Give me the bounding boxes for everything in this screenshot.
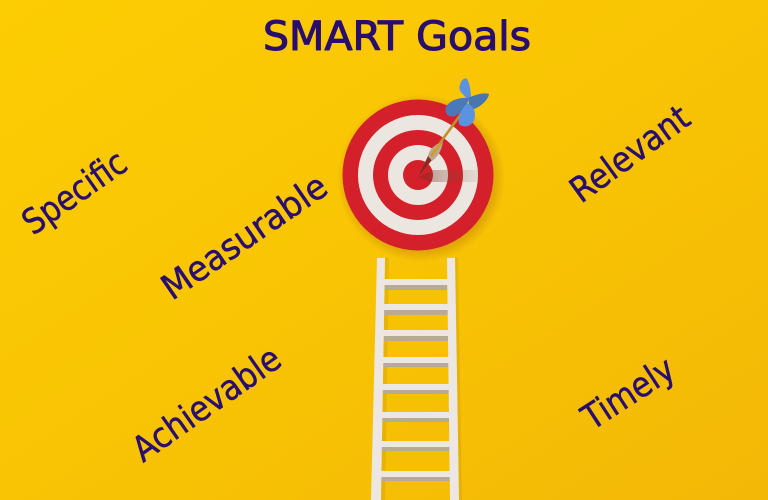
label: Achievable: Achievable bbox=[125, 339, 289, 470]
label: Specific: Specific bbox=[15, 143, 135, 243]
title: SMART Goals bbox=[263, 14, 531, 60]
target board bbox=[337, 94, 505, 262]
ladder bbox=[371, 258, 462, 500]
label: Timely: Timely bbox=[574, 349, 682, 439]
label: Measurable: Measurable bbox=[154, 167, 335, 308]
label: Relevant: Relevant bbox=[563, 98, 698, 211]
dart bbox=[418, 78, 489, 177]
